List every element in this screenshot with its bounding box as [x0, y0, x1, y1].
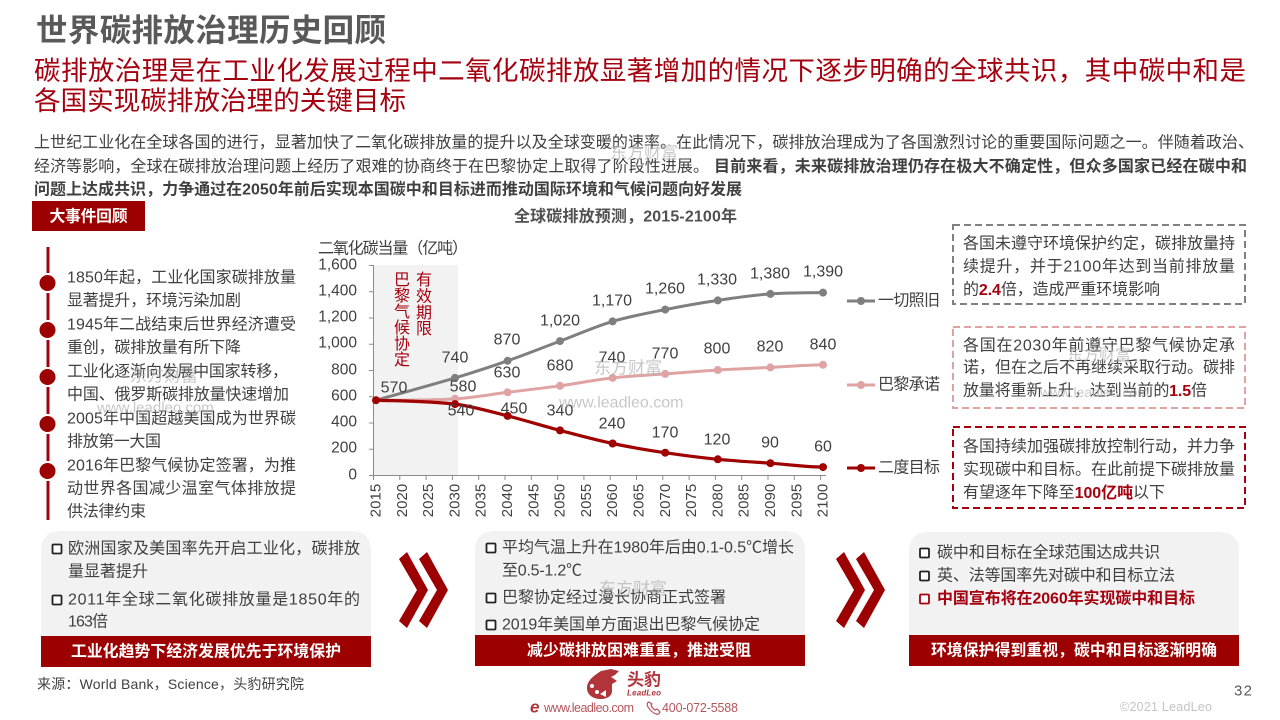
timeline text: 显著提升，环境污染加剧	[67, 290, 241, 310]
Paris agreement validity shading: 气	[394, 302, 410, 320]
arrow: stage two to stage three	[836, 552, 885, 628]
logo: LeadLeo: 头豹	[627, 670, 661, 690]
data labels: 60	[814, 438, 832, 456]
Paris agreement validity shading: 定	[394, 350, 410, 368]
data labels: 680	[547, 358, 573, 374]
x axis labels	[368, 484, 832, 517]
stage three bullets: 中国宣布将在2060年实现碳中和目标	[937, 588, 1195, 608]
data labels: 840	[810, 336, 836, 354]
x axis labels: 2100	[814, 484, 832, 517]
icon: browser: e	[530, 698, 539, 716]
Paris agreement validity shading: 协	[394, 334, 410, 352]
timeline text: 重创，碳排放量有所下降	[67, 338, 241, 356]
x axis labels: 2055	[578, 484, 595, 517]
axes	[369, 265, 826, 480]
data labels: 740	[599, 350, 625, 366]
stage one bullets: 2011年全球二氧化碳排放量是1850年的	[68, 590, 360, 608]
data labels: 340	[547, 402, 573, 420]
logo: LeadLeo: LeadLeo	[627, 688, 661, 698]
panel: stage three carbon neutrality	[909, 532, 1239, 666]
x axis labels: 2070	[657, 484, 674, 517]
heading: major events: 大事件回顾	[50, 206, 128, 226]
timeline text: 1850年起，工业化国家碳排放量	[67, 268, 296, 286]
callout: Paris pledges: 诺，但在之后不再继续采取行动。碳排	[963, 358, 1235, 376]
data labels	[381, 264, 843, 456]
stage two conclusion bar	[475, 635, 805, 666]
x axis labels: 2040	[499, 484, 516, 517]
data labels: 770	[652, 346, 678, 362]
series: Paris pledges	[376, 361, 827, 403]
data labels: 1,260	[645, 280, 685, 298]
callout: Paris pledges: 放量将重新上升，达到当前的1.5倍	[963, 382, 1207, 400]
intro text block: 目前来看，未来碳排放治理仍存在极大不确定性，但众多国家已经在碳中和	[714, 156, 1247, 176]
y axis labels: 400	[331, 414, 357, 430]
callout: two degree target	[953, 427, 1245, 508]
callout: business as usual: 续提升，并于2100年达到当前排放量	[963, 258, 1235, 276]
x axis labels: 2015	[368, 484, 384, 517]
data labels: 580	[450, 378, 476, 396]
y axis labels: 1,200	[318, 308, 357, 326]
title: 世界碳排放治理历史回顾	[36, 12, 386, 48]
Paris agreement validity shading: 效	[416, 287, 432, 305]
footer contact: www.leadleo.com	[543, 701, 634, 715]
timeline text	[67, 268, 296, 520]
x axis labels: 2060	[604, 484, 621, 517]
timeline text: 1945年二战结束后世界经济遭受	[67, 316, 296, 334]
stage two bullets: 至0.5-1.2℃	[502, 562, 582, 580]
Paris agreement validity shading: 巴	[394, 272, 410, 288]
Paris agreement validity shading: 有	[416, 270, 432, 288]
data labels: 630	[494, 364, 520, 382]
callout: two degree target: 实现碳中和目标。在此前提下碳排放量	[963, 460, 1235, 478]
panel: stage one industrialisation	[41, 531, 371, 667]
x axis labels: 2035	[473, 484, 490, 517]
y axis labels: 1,000	[318, 334, 357, 352]
data labels: 1,390	[803, 264, 843, 280]
timeline panel: major events	[40, 247, 296, 520]
legend: 二度目标	[878, 458, 940, 476]
data labels: 1,170	[592, 292, 632, 310]
stage three bullets	[920, 544, 1195, 608]
data labels: 570	[381, 380, 407, 396]
icon: phone	[647, 702, 660, 714]
y axis labels: 1,600	[318, 256, 357, 274]
data labels: 1,330	[697, 272, 737, 288]
data labels: 870	[494, 332, 520, 348]
data labels: 1,020	[540, 312, 580, 330]
watermarks: 东方财富	[1067, 346, 1131, 364]
intro text block: 经济等影响，全球在碳排放治理问题上经历了艰难的协商终于在巴黎协定上取得了阶段性进展。	[34, 158, 709, 176]
x axis labels: 2050	[552, 484, 569, 517]
intro text block	[34, 134, 1254, 198]
x axis labels: 2095	[788, 484, 805, 517]
watermarks: www.leadleo.com	[1039, 384, 1149, 400]
timeline text: 动世界各国减少温室气体排放提	[67, 480, 296, 498]
x axis labels: 2025	[420, 484, 437, 517]
data labels: 1,380	[750, 266, 790, 282]
source note: 来源：World Bank，Science，头豹研究院	[37, 676, 304, 692]
x axis labels: 2030	[446, 484, 463, 517]
Paris agreement validity shading: 期	[416, 303, 432, 321]
y axis title: 二氧化碳当量（亿吨）	[318, 240, 468, 258]
stage three conclusion bar	[909, 635, 1239, 666]
stage one bullets: 欧洲国家及美国率先开启工业化，碳排放	[68, 540, 360, 558]
callout: two degree target: 有望逐年下降至100亿吨以下	[963, 484, 1165, 502]
stage one bullets: 163倍	[68, 612, 108, 630]
copyright: ©2021 LeadLeo	[1120, 700, 1212, 714]
chart title: 全球碳排放预测，2015-2100年	[514, 206, 737, 226]
timeline text: 供法律约束	[67, 502, 146, 520]
intro text block: 上世纪工业化在全球各国的进行，显著加快了二氧化碳排放量的提升以及全球变暖的速率。在此情况下，碳排放治理成为了各国激烈讨论的重要国际问题之一。伴随着政治、	[34, 134, 1254, 152]
stage three bullets: 英、法等国率先对碳中和目标立法	[937, 566, 1175, 584]
timeline axis with dots	[40, 247, 56, 520]
subtitle: 碳排放治理是在工业化发展过程中二氧化碳排放显著增加的情况下逐步明确的全球共识，其中碳中和是	[34, 56, 1246, 86]
y axis labels: 600	[331, 388, 357, 404]
x axis labels: 2080	[709, 484, 726, 517]
line chart: global carbon emission forecast	[318, 240, 940, 517]
timeline text: 2016年巴黎气候协定签署，为推	[67, 456, 296, 474]
timeline text: 中国、俄罗斯碳排放量快速增加	[67, 386, 289, 404]
icon: leopard head	[587, 669, 619, 699]
x axis labels: 2090	[762, 484, 779, 517]
data labels: 800	[704, 340, 730, 358]
x axis labels: 2065	[630, 484, 648, 517]
watermarks: www.leadleo.com	[96, 400, 214, 416]
x axis labels: 2085	[736, 484, 753, 517]
watermarks: 东方财富	[599, 580, 667, 598]
logo: LeadLeo	[587, 669, 661, 699]
y axis labels: 1,400	[318, 282, 357, 300]
y axis labels: 200	[331, 440, 357, 456]
timeline text: 排放第一大国	[67, 432, 161, 450]
watermarks	[96, 144, 1149, 598]
stage two bullets: 平均气温上升在1980年后由0.1-0.5℃增长	[502, 538, 794, 556]
stage one bullets	[52, 540, 360, 630]
intro text block: 问题上达成共识，力争通过在2050年前后实现本国碳中和目标进而推动国际环境和气候问题向好发展	[34, 180, 742, 198]
x axis labels: 2045	[525, 484, 542, 517]
y axis labels	[318, 256, 357, 484]
subtitle: 各国实现碳排放治理的关键目标	[34, 86, 406, 116]
series: two degree target	[372, 396, 827, 471]
timeline text: 工业化逐渐向发展中国家转移，	[67, 362, 288, 380]
data labels: 120	[704, 432, 730, 448]
Paris agreement validity shading: 限	[416, 320, 432, 338]
legend: 一切照旧	[878, 292, 940, 310]
data labels: 740	[442, 350, 468, 366]
Paris agreement validity shading	[374, 265, 458, 475]
stage one bullets: 量显著提升	[68, 562, 148, 580]
heading: major events	[32, 201, 145, 231]
x axis labels: 2075	[683, 484, 700, 517]
watermarks: www.leadleo.com	[558, 394, 684, 412]
y axis labels: 0	[348, 466, 357, 484]
x axis labels: 2020	[394, 484, 411, 517]
data labels: 820	[757, 338, 783, 356]
callout: business as usual	[953, 225, 1245, 304]
data labels: 540	[448, 402, 474, 420]
y axis labels: 800	[331, 362, 357, 378]
legend: 巴黎承诺	[878, 376, 940, 394]
stage two bullets: 巴黎协定经过漫长协商正式签署	[502, 588, 726, 606]
callout: business as usual: 的2.4倍，造成严重环境影响	[963, 280, 1160, 298]
legend	[847, 292, 940, 476]
data labels: 170	[652, 424, 678, 442]
stage two bullets	[486, 538, 794, 634]
timeline text: 2005年中国超越美国成为世界碳	[67, 410, 296, 428]
subtitle	[34, 56, 1246, 116]
stage three bullets: 碳中和目标在全球范围达成共识	[937, 544, 1160, 562]
footer contact	[530, 698, 738, 716]
page number: 32	[1234, 682, 1252, 700]
callout: business as usual: 各国未遵守环境保护约定，碳排放量持	[963, 234, 1235, 252]
stage one conclusion bar: 工业化趋势下经济发展优先于环境保护	[71, 642, 341, 660]
stage two conclusion bar: 减少碳排放困难重重，推进受阻	[527, 640, 751, 660]
watermarks: 东方财富	[130, 366, 198, 386]
stage three conclusion bar: 环境保护得到重视，碳中和目标逐渐明确	[931, 640, 1217, 660]
stage one conclusion bar	[41, 636, 371, 667]
series: business as usual	[376, 289, 827, 400]
data labels: 450	[501, 400, 527, 418]
Paris agreement validity shading: 候	[394, 318, 410, 336]
watermarks: 东方财富	[594, 358, 662, 378]
data labels: 240	[599, 416, 625, 432]
data labels: 90	[761, 434, 779, 452]
arrow: stage one to stage two	[399, 552, 448, 628]
watermarks: 东方财富	[610, 144, 678, 162]
callout: Paris pledges: 各国在2030年前遵守巴黎气候协定承	[963, 336, 1235, 354]
footer contact: 400-072-5588	[662, 701, 738, 715]
panel: stage two negotiations	[475, 531, 805, 666]
callout: Paris pledges	[953, 327, 1245, 408]
stage two bullets: 2019年美国单方面退出巴黎气候协定	[502, 616, 760, 634]
callout: two degree target: 各国持续加强碳排放控制行动，并力争	[963, 438, 1235, 456]
Paris agreement validity shading: 黎	[394, 286, 410, 304]
